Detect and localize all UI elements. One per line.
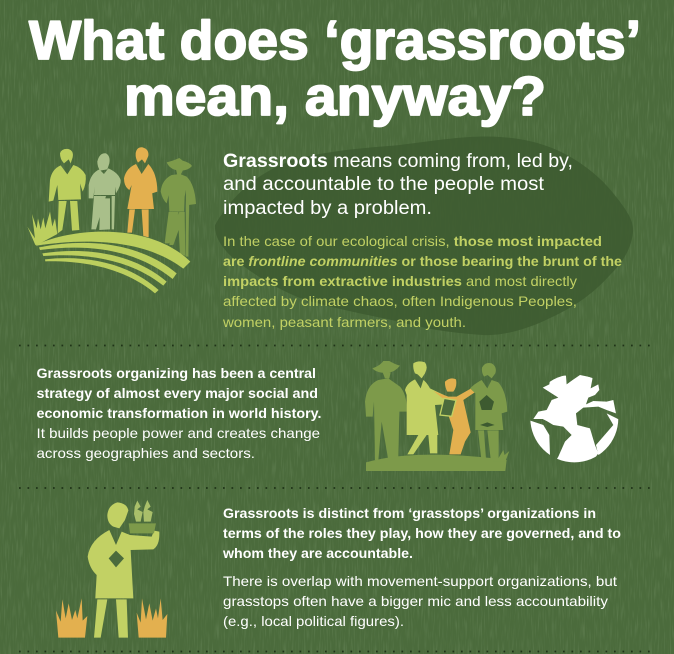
body text: ecological crisis: women, peasant farmers, and youth. <box>222 314 466 330</box>
text: grassroots organizing history <box>36 366 322 461</box>
icon: person holding a plant with grass <box>56 500 167 638</box>
title <box>29 9 641 127</box>
heading line 3: impacted by a problem. <box>223 198 432 219</box>
text: grasstops distinction: whom they are accountable. <box>222 546 413 561</box>
text: grasstops distinction: (e.g., local political figures). <box>223 613 404 629</box>
text: grassroots organizing history: strategy of almost every major social and <box>36 386 318 401</box>
body text: ecological crisis: In the case of our ecological crisis, those most impacted <box>223 233 602 249</box>
heading: definition of grassroots: Grassroots means coming from, led by, <box>223 151 573 172</box>
text: grasstops distinction: terms of the roles they play, how they are governed, and to <box>223 526 621 541</box>
text: grassroots organizing history: across geographies and sectors. <box>36 445 255 461</box>
text: grassroots organizing history: economic transformation in world history. <box>36 406 322 421</box>
text: grasstops distinction <box>222 506 621 629</box>
body text: ecological crisis: impacts from extractive industries and most directly <box>223 273 577 289</box>
body text: ecological crisis: affected by climate chaos, often Indigenous Peoples, <box>223 293 577 309</box>
icon: globe <box>527 375 620 465</box>
text: grasstops distinction: Grassroots is distinct from ‘grasstops’ organizations in <box>223 506 596 521</box>
body text: ecological crisis <box>222 233 622 330</box>
text: grasstops distinction: There is overlap with movement-support organizations, but <box>223 573 617 589</box>
icon: group of four people on a hill <box>365 361 509 471</box>
body text: ecological crisis: are frontline communities or those bearing the brunt of the <box>223 253 622 269</box>
title: mean, anyway? <box>124 65 546 127</box>
icon: four people standing on a field <box>27 147 196 293</box>
title: What does ‘grassroots’ <box>29 9 641 71</box>
heading line 2: and accountable to the people most <box>223 174 545 195</box>
text: grassroots organizing history: It builds people power and creates change <box>36 425 320 441</box>
text: grasstops distinction: grasstops often have a bigger mic and less accountability <box>223 593 608 609</box>
text: grassroots organizing history: Grassroots organizing has been a central <box>36 366 316 381</box>
